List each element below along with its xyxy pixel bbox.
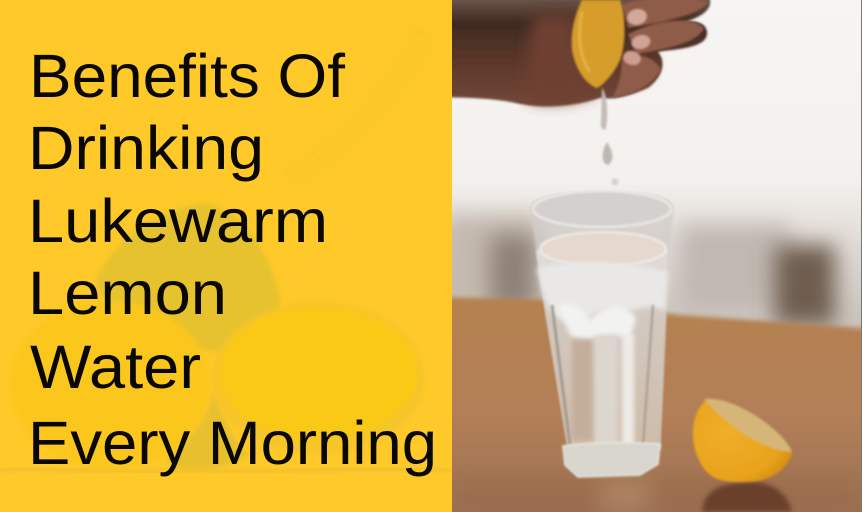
table foreground shade [452,480,861,512]
splash speckle [290,30,425,178]
panel: yellow title panel [0,0,452,512]
right lemon half rind [221,309,277,350]
left lemon half [10,301,210,469]
glass facets [552,305,570,445]
fingernails [626,7,648,27]
fingers highlight [612,0,708,98]
title: Lukewarm [28,187,328,255]
glass body [530,191,674,450]
lemon half on table [693,399,792,482]
ice [537,262,668,324]
arm and palm [440,0,710,106]
palm warm tone [528,15,597,102]
glass of water [530,191,674,477]
illustration: faded lemons [0,30,452,472]
back whole lemon [95,203,280,352]
background wall [452,0,861,330]
glass reflection on table [600,480,650,512]
juice drops [601,88,618,186]
photo: lemon squeezed into a glass of water [440,0,864,512]
lemon base shadow [165,393,250,469]
title: Lemon [28,259,227,327]
water surface [540,232,666,266]
rim interior [533,191,671,227]
lemon in hand [572,0,624,88]
lemon flesh [704,399,792,452]
glass base [563,443,660,477]
title: Drinking [28,114,264,182]
lemon shadow [702,482,792,512]
title [28,42,437,477]
right lemon half flesh [220,307,418,439]
surface speckle line [0,469,452,472]
table [440,297,864,512]
title: Benefits Of [29,42,346,110]
lemon rind [693,400,792,482]
blurred background band [440,215,835,325]
title: Every Morning [28,409,437,477]
title: Water [30,333,201,401]
photo right edge line [861,0,862,512]
water body [536,250,668,450]
hand with lemon [440,0,710,106]
